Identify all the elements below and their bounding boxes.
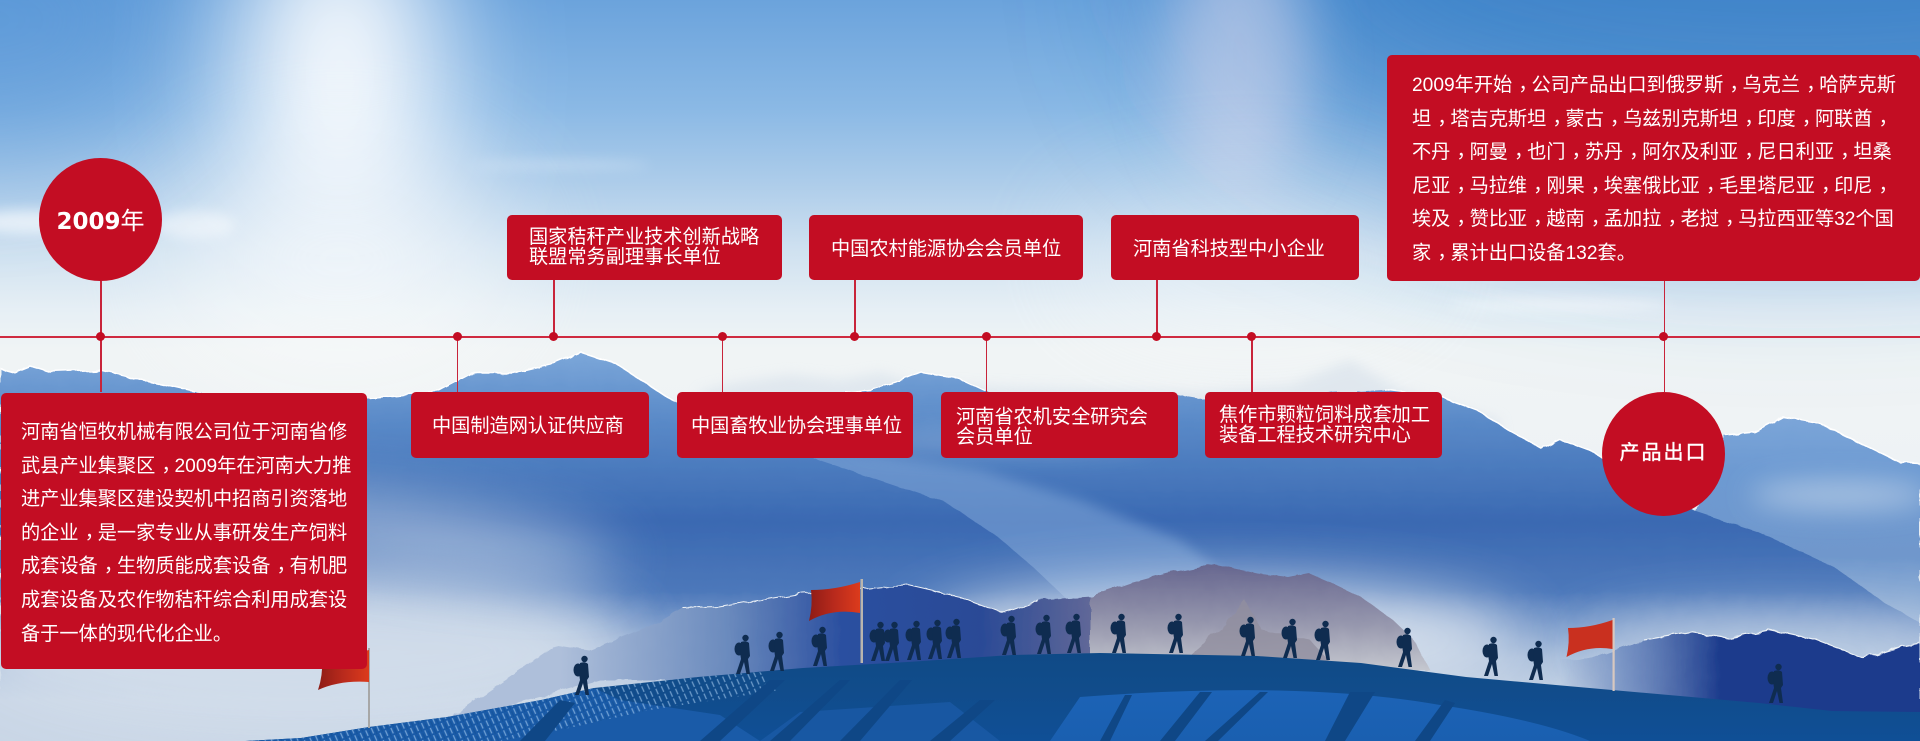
box: 河南省科技型中小企业: [1111, 215, 1359, 280]
axis dot: [1246, 332, 1256, 341]
connector: 畜牧业: [722, 337, 723, 392]
box: 国家秸秆联盟: 联盟常务副理事长单位: [529, 246, 721, 268]
box: 河南省农机安全研究会: 会员单位: [956, 426, 1033, 448]
connector: 2009年: [100, 281, 102, 392]
hikers: [574, 614, 1783, 703]
connector: 制造网: [456, 337, 458, 392]
connector: 焦作市: [1251, 337, 1252, 392]
box: 中国制造网: [411, 392, 649, 458]
box: 中国农村能源协会: 中国农村能源协会会员单位: [831, 239, 1061, 260]
mist bands: [0, 430, 1920, 730]
panel: company introduction: 备于一体的现代化企业。: [21, 624, 232, 645]
axis dot: [718, 332, 726, 341]
box: 焦作市颗粒饲料: [1205, 392, 1442, 458]
box: 国家秸秆联盟: 国家秸秆产业技术创新战略: [529, 227, 759, 248]
panel: company introduction: 成套设备及农作物秸秆综合利用成套设: [21, 590, 347, 611]
panel: product export: 2009年开始 ，公司产品出口到俄罗斯 ，乌克兰 ，哈萨克斯: [1412, 74, 1896, 96]
box: 中国制造网: 中国制造网认证供应商: [432, 416, 624, 437]
panel: product export: 尼亚 ，马拉维 ，刚果 ，埃塞俄比亚 ，毛里塔尼亚 ，印尼 ，: [1412, 175, 1898, 197]
box: 焦作市颗粒饲料: 装备工程技术研究中心: [1219, 424, 1411, 446]
lighter slope between the ranges: [640, 400, 1300, 720]
circle: 产品出口: 产品出口: [1620, 442, 1708, 464]
connector: 农村能源: [854, 280, 856, 337]
panel: product export: 埃及 ，赞比亚 ，越南 ，孟加拉 ，老挝 ，马拉西亚等32个国: [1412, 208, 1894, 230]
panel: product export: 家 ，累计出口设备132套。: [1412, 242, 1636, 264]
ground ridge: [245, 653, 1920, 741]
box: 河南省农机安全研究会: [941, 392, 1178, 458]
axis dot: [850, 332, 858, 341]
panel: company introduction: 河南省恒牧机械有限公司位于河南省修: [21, 422, 347, 443]
axis dot: [982, 332, 990, 341]
panel: company introduction: 的企业 ，是一家专业从事研发生产饲料: [21, 522, 347, 544]
circle: 2009年: [39, 158, 162, 281]
box: 中国畜牧业协会: [677, 392, 913, 458]
front range: [0, 352, 1130, 741]
circle: 2009年: 2009年: [56, 201, 144, 236]
box: 河南省科技型中小企业: 河南省科技型中小企业: [1133, 239, 1325, 260]
flag poles and flags: [318, 579, 1615, 728]
axis dot: [1659, 332, 1668, 341]
box: 河南省农机安全研究会: 河南省农机安全研究会: [956, 407, 1148, 428]
distant pale ridges: [700, 360, 1500, 460]
box: 国家秸秆联盟: [507, 215, 782, 280]
panel: company introduction: 进产业集聚区建设契机中招商引资落地: [21, 489, 347, 510]
panel: product export: 不丹 ，阿曼 ，也门 ，苏丹 ，阿尔及利亚 ，尼日利亚 ，坦桑: [1412, 141, 1892, 163]
panel: product export: [1387, 55, 1920, 281]
connector: 科技型: [1156, 280, 1158, 337]
panel: product export: 坦 ，塔吉克斯坦 ，蒙古 ，乌兹别克斯坦 ，印度 ，阿联酋 ，: [1412, 108, 1898, 130]
box: 焦作市颗粒饲料: 焦作市颗粒饲料成套加工: [1219, 405, 1430, 426]
box: 中国农村能源协会: [809, 215, 1083, 280]
timeline axis: [0, 336, 1920, 338]
panel: company introduction: [1, 393, 367, 669]
axis dot: [96, 332, 104, 341]
foreground dark mountains: [440, 564, 1920, 725]
connector: 农机安全: [986, 337, 987, 392]
axis dot: [548, 332, 558, 341]
panel: company introduction: 成套设备 ，生物质能成套设备 ，有机肥: [21, 555, 347, 577]
box: 中国畜牧业协会: 中国畜牧业协会理事单位: [691, 416, 902, 437]
connector: 秸秆联盟: [553, 280, 554, 337]
mountain range: [640, 372, 1920, 741]
connector: 产品出口: [1664, 281, 1665, 392]
panel: company introduction: 武县产业集聚区 ，2009年在河南大力推: [21, 455, 352, 477]
axis dot: [452, 332, 462, 341]
axis dot: [1152, 332, 1160, 341]
circle: 产品出口: [1602, 392, 1725, 516]
